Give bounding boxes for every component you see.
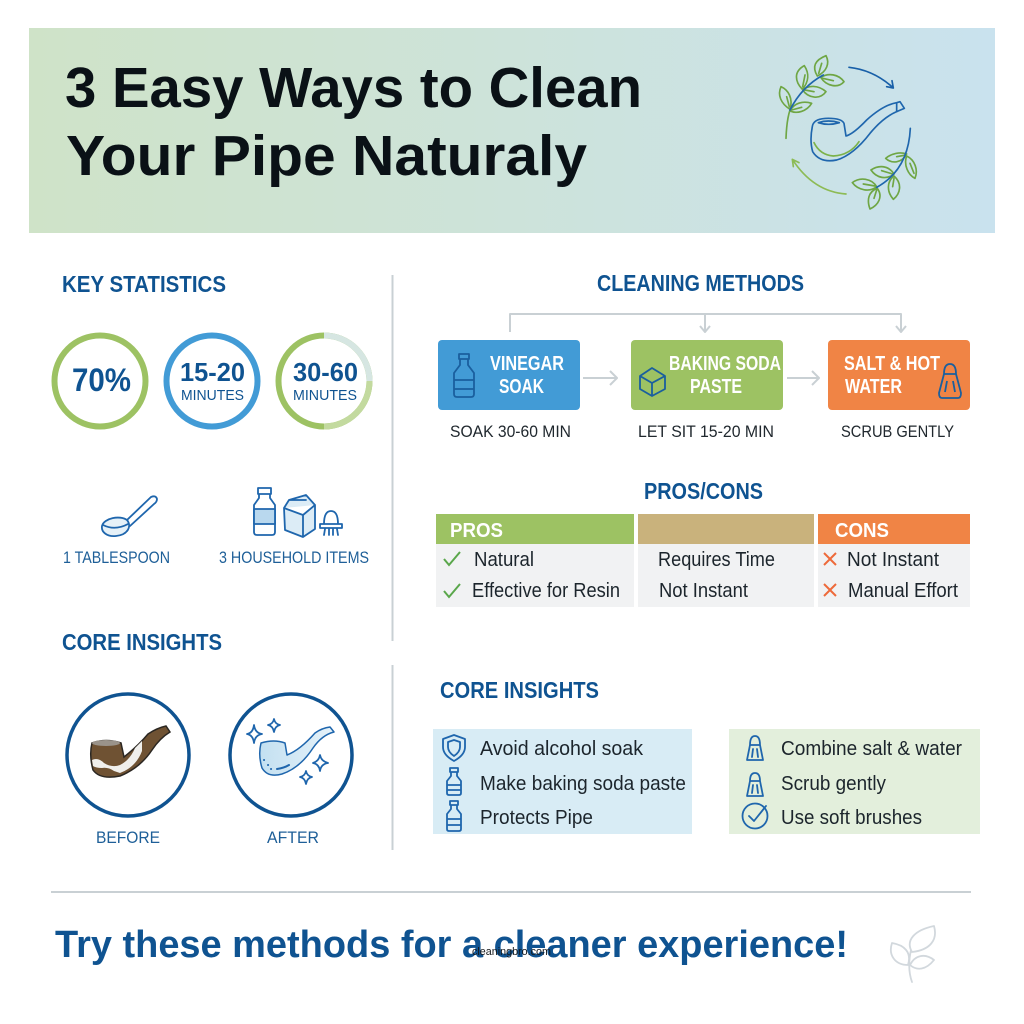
card: vinegar soak: SOAK [499,376,544,398]
icon: bottle [447,801,461,831]
heading: core insights left: CORE INSIGHTS [62,629,222,655]
after circle with clean pipe [230,694,352,816]
icon: shield [443,735,465,761]
arrow: vinegar to baking soda [583,371,617,385]
card: baking soda paste: BAKING SODA [669,353,781,375]
watermark: cleaningbro.com [472,946,551,958]
card: vinegar soak: VINEGAR [490,353,564,375]
column: pros: Natural [474,549,534,571]
label: after: AFTER [267,828,319,847]
stat ring: 70%: 70% [72,362,131,398]
divider: left and right columns [392,275,394,850]
stat ring: 15-20 minutes: MINUTES [181,387,244,404]
card: baking soda paste [631,340,783,410]
icon: footer leaf [891,926,935,982]
insight box: blue [433,729,692,834]
card: salt and hot water: WATER [845,376,902,398]
label: 1 tablespoon: 1 TABLESPOON [63,548,170,567]
caption: soak time: SOAK 30-60 MIN [450,422,571,441]
panel: before and after [62,629,352,847]
header banner [29,28,995,233]
stat ring: 15-20 minutes: 15-20 [180,357,245,387]
heading: pros/cons: PROS/CONS [644,478,763,504]
insight box: blue: Make baking soda paste [480,773,686,795]
icon: salt shaker [747,773,763,796]
column: neutral [638,514,814,607]
stat ring: 15-20 minutes [166,336,258,426]
arrow: baking soda to salt [787,371,819,385]
column: pros: PROS [450,520,503,542]
icon: household items [254,488,342,537]
before circle with dirty pipe [67,694,189,816]
stat ring: 30-60 minutes: MINUTES [293,387,357,404]
icon: cube [640,368,665,396]
call to action: Try these methods for a cleaner experience! [55,924,848,966]
column: cons [818,514,970,607]
column: neutral: Not Instant [659,580,748,602]
icon: bottle [454,354,474,397]
label: before: BEFORE [96,828,160,847]
icon: pipe with leaves and cycle arrows [780,56,916,209]
divider: footer rule [51,891,971,893]
card: vinegar soak [438,340,580,410]
icon: salt shaker [939,364,961,398]
column: cons: CONS [835,520,889,542]
insight box: green: Combine salt & water [781,738,962,760]
title: 3 Easy Ways to Clean [65,56,642,120]
card: baking soda paste: PASTE [690,376,742,398]
label: 3 household items: 3 HOUSEHOLD ITEMS [219,548,369,567]
insight box: green: Scrub gently [781,773,886,795]
column: pros [436,514,634,607]
connector arrows from first method [510,314,906,332]
column: cons: Manual Effort [848,580,958,602]
card: salt and hot water: SALT & HOT [844,353,940,375]
panel: key statistics [54,271,370,567]
title: Your Pipe Naturaly [66,124,587,188]
caption: paste time: LET SIT 15-20 MIN [638,422,774,441]
stat ring: 30-60 minutes: 30-60 [293,357,358,387]
heading: core insights right: CORE INSIGHTS [440,677,599,703]
stat ring: 70% [54,336,146,426]
panel: cleaning methods [438,270,970,441]
icon: check circle [742,804,768,828]
caption: scrub: SCRUB GENTLY [841,422,954,441]
column: neutral: Requires Time [658,549,775,571]
card: salt and hot water [828,340,970,410]
stat ring: 30-60 minutes [278,336,370,426]
icon: bottle [447,768,461,795]
insight box: blue: Avoid alcohol soak [480,738,644,760]
insight box: blue: Protects Pipe [480,807,593,829]
column: pros: Effective for Resin [472,580,620,602]
icon: tablespoon [102,496,157,536]
heading: key statistics: KEY STATISTICS [62,271,226,297]
title [65,56,642,188]
panel: pros and cons [436,478,970,607]
icon: salt shaker [747,736,763,760]
insight box: green: Use soft brushes [781,807,922,829]
column: cons: Not Instant [847,549,939,571]
heading: cleaning methods: CLEANING METHODS [597,270,804,296]
panel: core insights [433,677,980,834]
insight box: green [729,729,980,834]
